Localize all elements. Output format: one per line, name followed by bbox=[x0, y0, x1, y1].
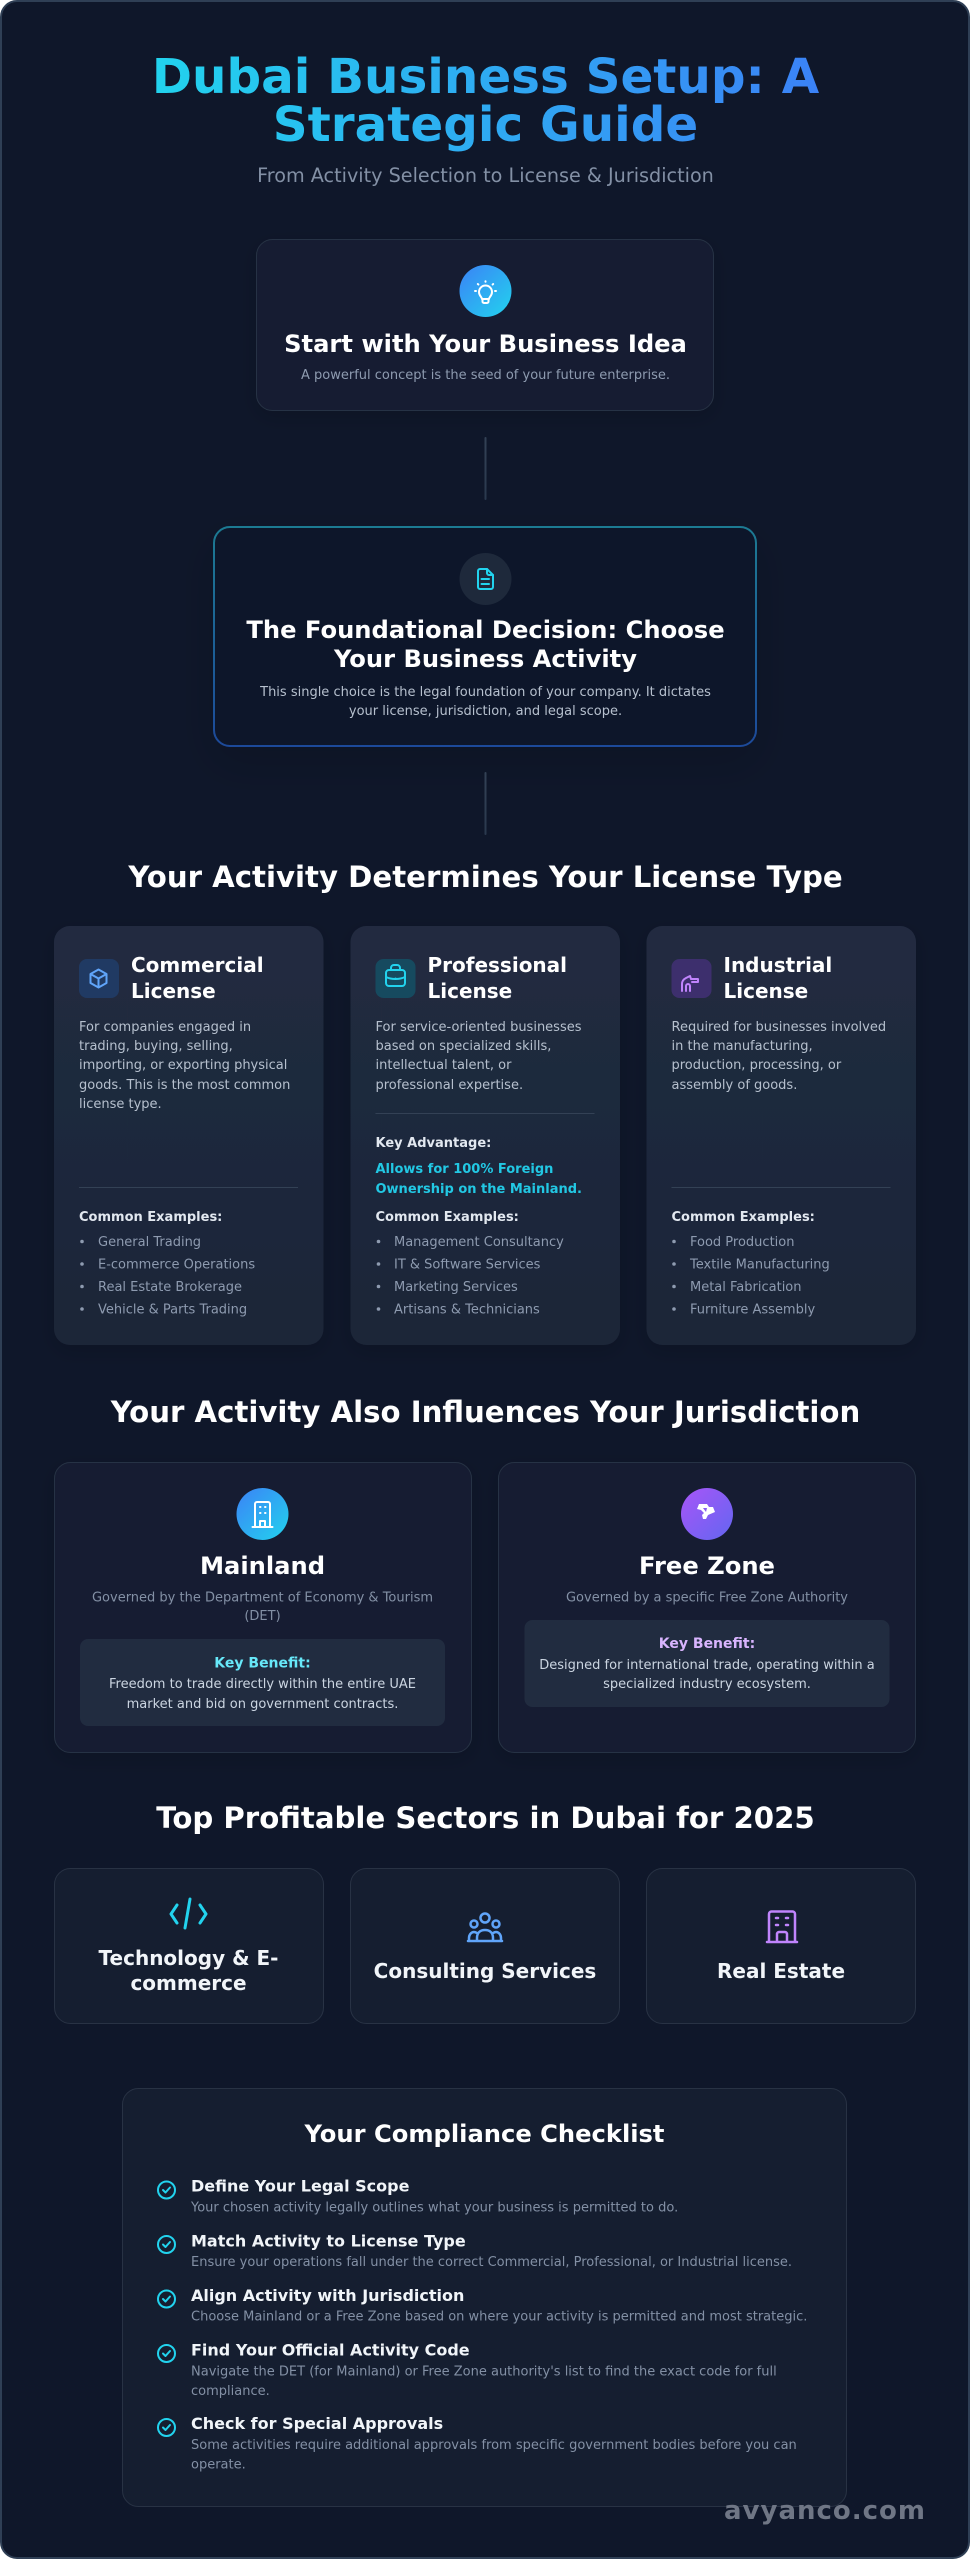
description: license type. bbox=[79, 1097, 162, 1112]
heading: Commercial bbox=[131, 953, 264, 977]
panel: industrial license bbox=[646, 926, 916, 1345]
common examples: General Trading bbox=[98, 1235, 201, 1250]
panel: free zone: Free Zone bbox=[639, 1552, 775, 1580]
heading bbox=[724, 953, 832, 1003]
key benefit: market and bid on government contracts. bbox=[127, 1697, 398, 1712]
governing body bbox=[92, 1590, 433, 1624]
common examples: Textile Manufacturing bbox=[689, 1258, 830, 1272]
icon: lightbulb bbox=[460, 265, 512, 317]
connector bbox=[484, 772, 486, 835]
panel: commercial license bbox=[54, 926, 324, 1345]
key benefit: Key Benefit: bbox=[214, 1656, 311, 1672]
panel: real estate: Real Estate bbox=[717, 1959, 845, 1983]
common examples: Marketing Services bbox=[394, 1280, 518, 1295]
check item 4: Find Your Official Activity Code bbox=[191, 2340, 470, 2360]
common examples: Food Production bbox=[690, 1235, 794, 1250]
description: production, processing, or bbox=[672, 1058, 842, 1073]
description: in the manufacturing, bbox=[672, 1039, 813, 1054]
check item 1: Your chosen activity legally outlines what your business is permitted to do. bbox=[190, 2200, 678, 2216]
panel: start with your business idea: A powerful concept is the seed of your future enterprise. bbox=[301, 368, 670, 383]
common examples: Vehicle & Parts Trading bbox=[98, 1302, 247, 1318]
check item 5: operate. bbox=[191, 2458, 246, 2472]
description: trading, buying, selling, bbox=[79, 1039, 233, 1054]
heading: sectors: Top Profitable Sectors in Dubai for 2025 bbox=[156, 1801, 815, 1835]
check item 5: Some activities require additional approvals from specific government bodies before you can bbox=[191, 2438, 797, 2453]
panel: real estate bbox=[646, 1868, 916, 2024]
common examples: IT & Software Services bbox=[394, 1258, 541, 1272]
common examples: Furniture Assembly bbox=[690, 1302, 815, 1318]
panel: foundational decision: Your Business Activity bbox=[333, 645, 637, 673]
description: professional expertise. bbox=[376, 1078, 523, 1093]
check item 2: Match Activity to License Type bbox=[191, 2232, 466, 2250]
key benefit bbox=[524, 1620, 890, 1707]
description: intellectual talent, or bbox=[376, 1058, 512, 1073]
common examples: Management Consultancy bbox=[394, 1235, 564, 1250]
common examples bbox=[79, 1210, 255, 1318]
common examples: Metal Fabrication bbox=[690, 1280, 802, 1295]
key advantage bbox=[376, 1136, 582, 1197]
heading: Professional bbox=[428, 953, 567, 977]
key benefit: specialized industry ecosystem. bbox=[603, 1677, 811, 1692]
key benefit: Freedom to trade directly within the entire UAE bbox=[109, 1677, 416, 1692]
description: goods. This is the most common bbox=[79, 1078, 290, 1093]
heading: License bbox=[724, 979, 808, 1003]
panel: free zone bbox=[498, 1462, 916, 1752]
icon: office building bbox=[767, 1912, 797, 1942]
panel: start with your business idea: Start with Your Business Idea bbox=[284, 330, 687, 358]
check item 3 bbox=[158, 2286, 807, 2324]
icon: people bbox=[468, 1914, 502, 1941]
check item 4 bbox=[158, 2340, 777, 2399]
panel: technology bbox=[54, 1868, 324, 2024]
key advantage: Ownership on the Mainland. bbox=[376, 1182, 582, 1197]
check item 4: compliance. bbox=[191, 2384, 270, 2399]
common examples: Common Examples: bbox=[79, 1210, 222, 1225]
panel: consulting bbox=[350, 1868, 620, 2024]
heading: Industrial bbox=[724, 953, 832, 977]
heading: license type: Your Activity Determines Your License Type bbox=[127, 860, 843, 894]
connector bbox=[484, 437, 486, 500]
panel: professional license bbox=[350, 926, 620, 1345]
icon: building bbox=[236, 1488, 288, 1540]
heading bbox=[131, 953, 264, 1003]
description: based on specialized skills, bbox=[376, 1039, 551, 1054]
heading: License bbox=[428, 979, 512, 1003]
watermark: avyanco.com bbox=[724, 2496, 926, 2526]
common examples: Real Estate Brokerage bbox=[98, 1280, 242, 1295]
key benefit: Key Benefit: bbox=[659, 1636, 755, 1652]
panel: consulting: Consulting Services bbox=[374, 1959, 596, 1983]
check item 5: Check for Special Approvals bbox=[191, 2414, 443, 2433]
heading: License bbox=[131, 979, 216, 1003]
description: Required for businesses involved bbox=[672, 1020, 886, 1035]
description bbox=[376, 1020, 582, 1093]
check item 5 bbox=[158, 2414, 797, 2472]
check item 2: Ensure your operations fall under the correct Commercial, Professional, or Industrial license. bbox=[191, 2255, 792, 2270]
description bbox=[79, 1020, 290, 1112]
title bbox=[152, 49, 820, 153]
panel: compliance checklist bbox=[122, 2088, 846, 2506]
description: For companies engaged in bbox=[79, 1020, 251, 1035]
common examples: Common Examples: bbox=[376, 1210, 519, 1225]
description: For service-oriented businesses bbox=[376, 1020, 582, 1035]
key benefit bbox=[80, 1639, 445, 1726]
description: importing, or exporting physical bbox=[79, 1058, 287, 1073]
title: Strategic Guide bbox=[273, 97, 698, 153]
check item 4: Navigate the DET (for Mainland) or Free Zone authority's list to find the exact code for full bbox=[191, 2364, 777, 2380]
panel: technology: commerce bbox=[130, 1971, 247, 1995]
icon: document bbox=[460, 553, 512, 605]
common examples: Common Examples: bbox=[672, 1210, 815, 1225]
panel: foundational decision bbox=[214, 527, 756, 746]
heading: jurisdiction: Your Activity Also Influences Your Jurisdiction bbox=[110, 1395, 860, 1429]
common examples bbox=[672, 1210, 830, 1318]
icon: briefcase bbox=[376, 959, 416, 998]
panel: foundational decision: your license, jurisdiction, and legal scope. bbox=[349, 704, 622, 719]
governing body: (DET) bbox=[244, 1609, 281, 1624]
panel: start with your business idea bbox=[256, 240, 714, 410]
governing body: Governed by a specific Free Zone Authority bbox=[566, 1590, 848, 1606]
subtitle: From Activity Selection to License & Jurisdiction bbox=[257, 164, 714, 187]
governing body: Governed by the Department of Economy & Tourism bbox=[92, 1590, 433, 1606]
panel: foundational decision: This single choice is the legal foundation of your company. It dictates bbox=[259, 685, 711, 700]
panel: mainland bbox=[54, 1462, 472, 1752]
key advantage: Allows for 100% Foreign bbox=[376, 1162, 553, 1177]
check item 2 bbox=[158, 2232, 792, 2270]
icon: code bbox=[171, 1899, 206, 1928]
heading bbox=[428, 953, 567, 1003]
title: Dubai Business Setup: A bbox=[152, 49, 820, 105]
icon: free zone plane bbox=[681, 1488, 733, 1540]
check item 1 bbox=[158, 2176, 678, 2216]
checklist title: Your Compliance Checklist bbox=[304, 2120, 664, 2148]
icon: cube bbox=[79, 959, 119, 998]
common examples: Artisans & Technicians bbox=[394, 1302, 540, 1318]
common examples: E-commerce Operations bbox=[98, 1258, 255, 1272]
description: assembly of goods. bbox=[672, 1078, 797, 1093]
check item 3: Align Activity with Jurisdiction bbox=[191, 2286, 464, 2305]
panel: foundational decision: The Foundational Decision: Choose bbox=[246, 616, 725, 644]
panel: mainland: Mainland bbox=[200, 1552, 325, 1580]
key benefit: Designed for international trade, operating within a bbox=[539, 1658, 875, 1673]
panel: technology: Technology & E- bbox=[99, 1946, 278, 1970]
key advantage: Key Advantage: bbox=[376, 1136, 491, 1151]
check item 3: Choose Mainland or a Free Zone based on where your activity is permitted and most strategic. bbox=[191, 2310, 807, 2324]
icon: industrial bbox=[672, 959, 712, 998]
check item 1: Define Your Legal Scope bbox=[191, 2176, 410, 2196]
common examples bbox=[376, 1210, 564, 1318]
description bbox=[672, 1020, 886, 1093]
